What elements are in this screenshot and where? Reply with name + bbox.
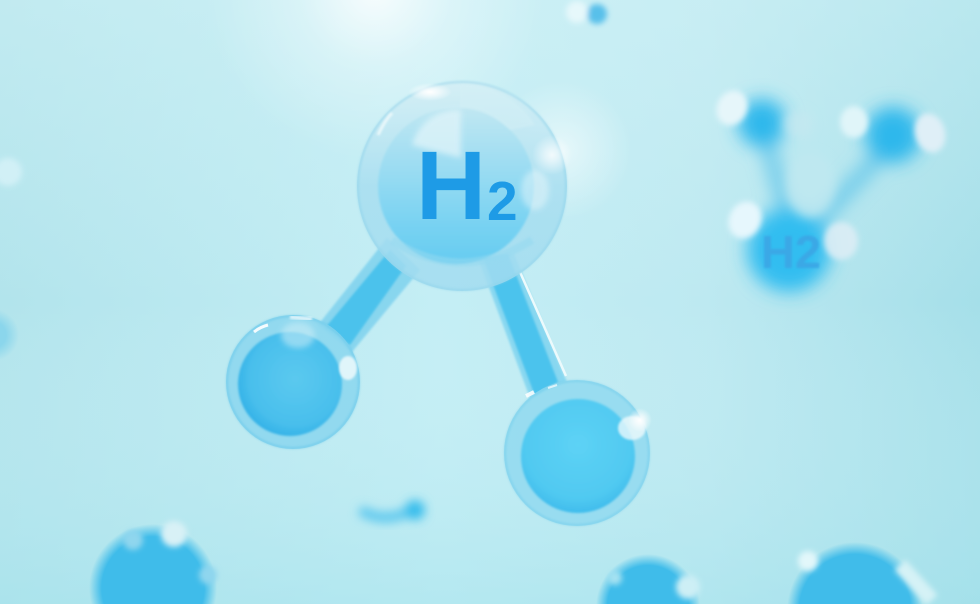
blurred molecule: small bottom centre: [360, 500, 425, 520]
sphere: lower right: [504, 380, 652, 526]
label: H2: H: [416, 131, 486, 240]
sphere: large top with H2: [357, 81, 572, 291]
blurred sphere: bottom right: [785, 540, 932, 604]
blurred sphere: bottom centre: [594, 552, 704, 604]
sphere: lower left: [226, 315, 360, 449]
bond: right: [478, 254, 567, 398]
blurred molecule: top right with H2: [711, 85, 950, 292]
main molecule: [226, 81, 652, 526]
blurred H2 label: H2: [761, 226, 821, 278]
label: H2: 2: [487, 170, 518, 232]
label: H2: [416, 131, 518, 240]
bond: left: [318, 238, 420, 352]
blurred molecule: left edge: [0, 158, 22, 365]
blurred sphere: bottom left: [85, 520, 225, 604]
blurred molecule: small top: [566, 1, 607, 24]
